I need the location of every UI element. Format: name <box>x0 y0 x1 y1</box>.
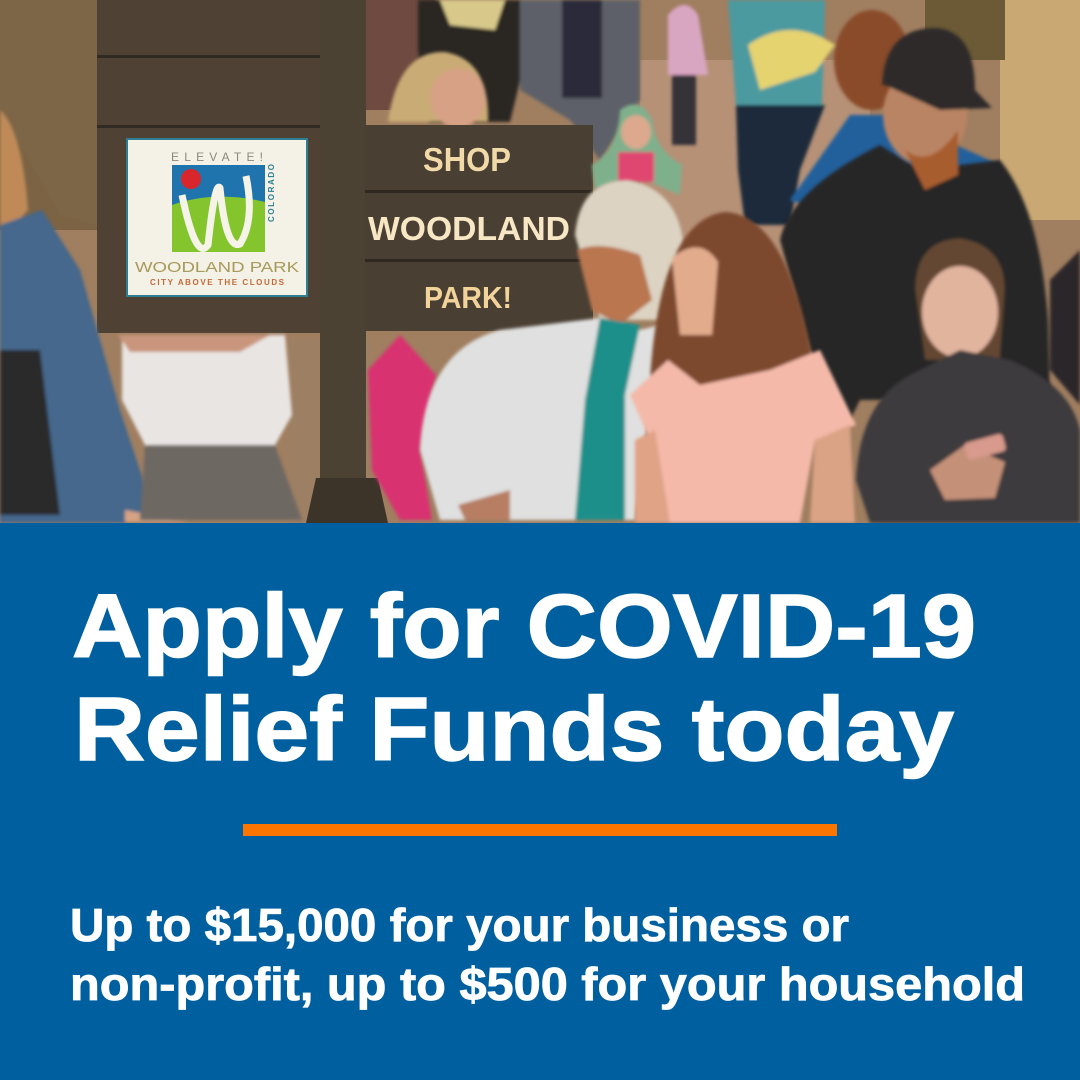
elderly woman <box>420 180 684 520</box>
man in black hoodie with cap <box>780 28 1080 420</box>
girl in pink floral shirt <box>630 212 856 523</box>
heading line 2: Relief Funds today <box>74 680 954 780</box>
wooden sign board <box>365 125 593 331</box>
child in green hood <box>592 104 682 195</box>
photo background <box>0 0 1080 523</box>
panel: blue text area <box>0 523 1080 1080</box>
person in white shirt <box>118 335 302 520</box>
sign post <box>97 0 388 523</box>
logo: Woodland Park: WOODLAND PARK <box>135 259 299 276</box>
woman on left in denim jacket <box>0 110 190 523</box>
woman behind sign <box>388 52 488 128</box>
sign text: park: PARK! <box>424 280 512 315</box>
wall left <box>0 0 97 225</box>
photo: crowd at Woodland Park sign <box>0 0 1080 523</box>
girl in grey hoodie <box>856 238 1080 523</box>
logo: Woodland Park: COLORADO <box>267 164 276 222</box>
logo: Woodland Park: ELEVATE! <box>171 150 263 164</box>
logo: Woodland Park: CITY ABOVE THE CLOUDS <box>150 278 285 287</box>
pink jacket <box>368 335 436 520</box>
logo: Woodland Park <box>127 139 307 296</box>
background people <box>418 0 1000 240</box>
heading <box>72 577 976 780</box>
sign text: shop: SHOP <box>423 141 511 178</box>
subheading <box>70 899 1025 1010</box>
orange divider <box>243 824 837 836</box>
subheading line 1: Up to $15,000 for your business or <box>70 899 849 951</box>
subheading line 2: non-profit, up to $500 for your household <box>70 958 1025 1010</box>
sign text: woodland: WOODLAND <box>368 210 570 247</box>
heading line 1: Apply for COVID-19 <box>72 577 976 677</box>
